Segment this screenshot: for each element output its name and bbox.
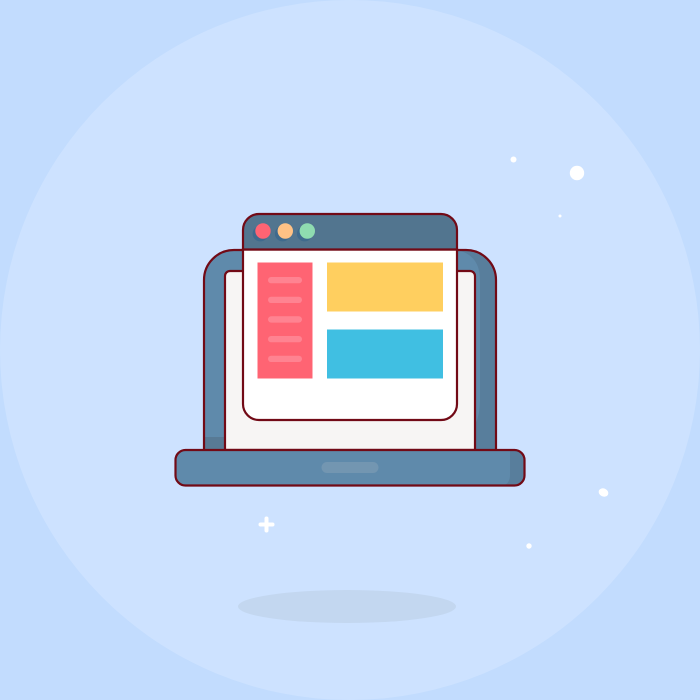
red window button bbox=[253, 223, 271, 241]
green window button bbox=[297, 223, 315, 241]
orange window button bbox=[275, 223, 293, 241]
laptop lid bbox=[204, 250, 496, 450]
yellow content block bbox=[327, 262, 443, 312]
ground shadow bbox=[238, 590, 456, 623]
window body bbox=[243, 250, 457, 420]
trackpad notch bbox=[322, 462, 378, 473]
laptop base bbox=[176, 450, 524, 486]
red sidebar bbox=[258, 262, 312, 378]
browser window bbox=[243, 214, 457, 420]
window title bar bbox=[243, 214, 457, 250]
laptop screen bbox=[225, 271, 475, 450]
decorative sparkles bbox=[260, 156, 610, 549]
laptop bbox=[176, 250, 524, 486]
blue content block bbox=[327, 330, 443, 378]
